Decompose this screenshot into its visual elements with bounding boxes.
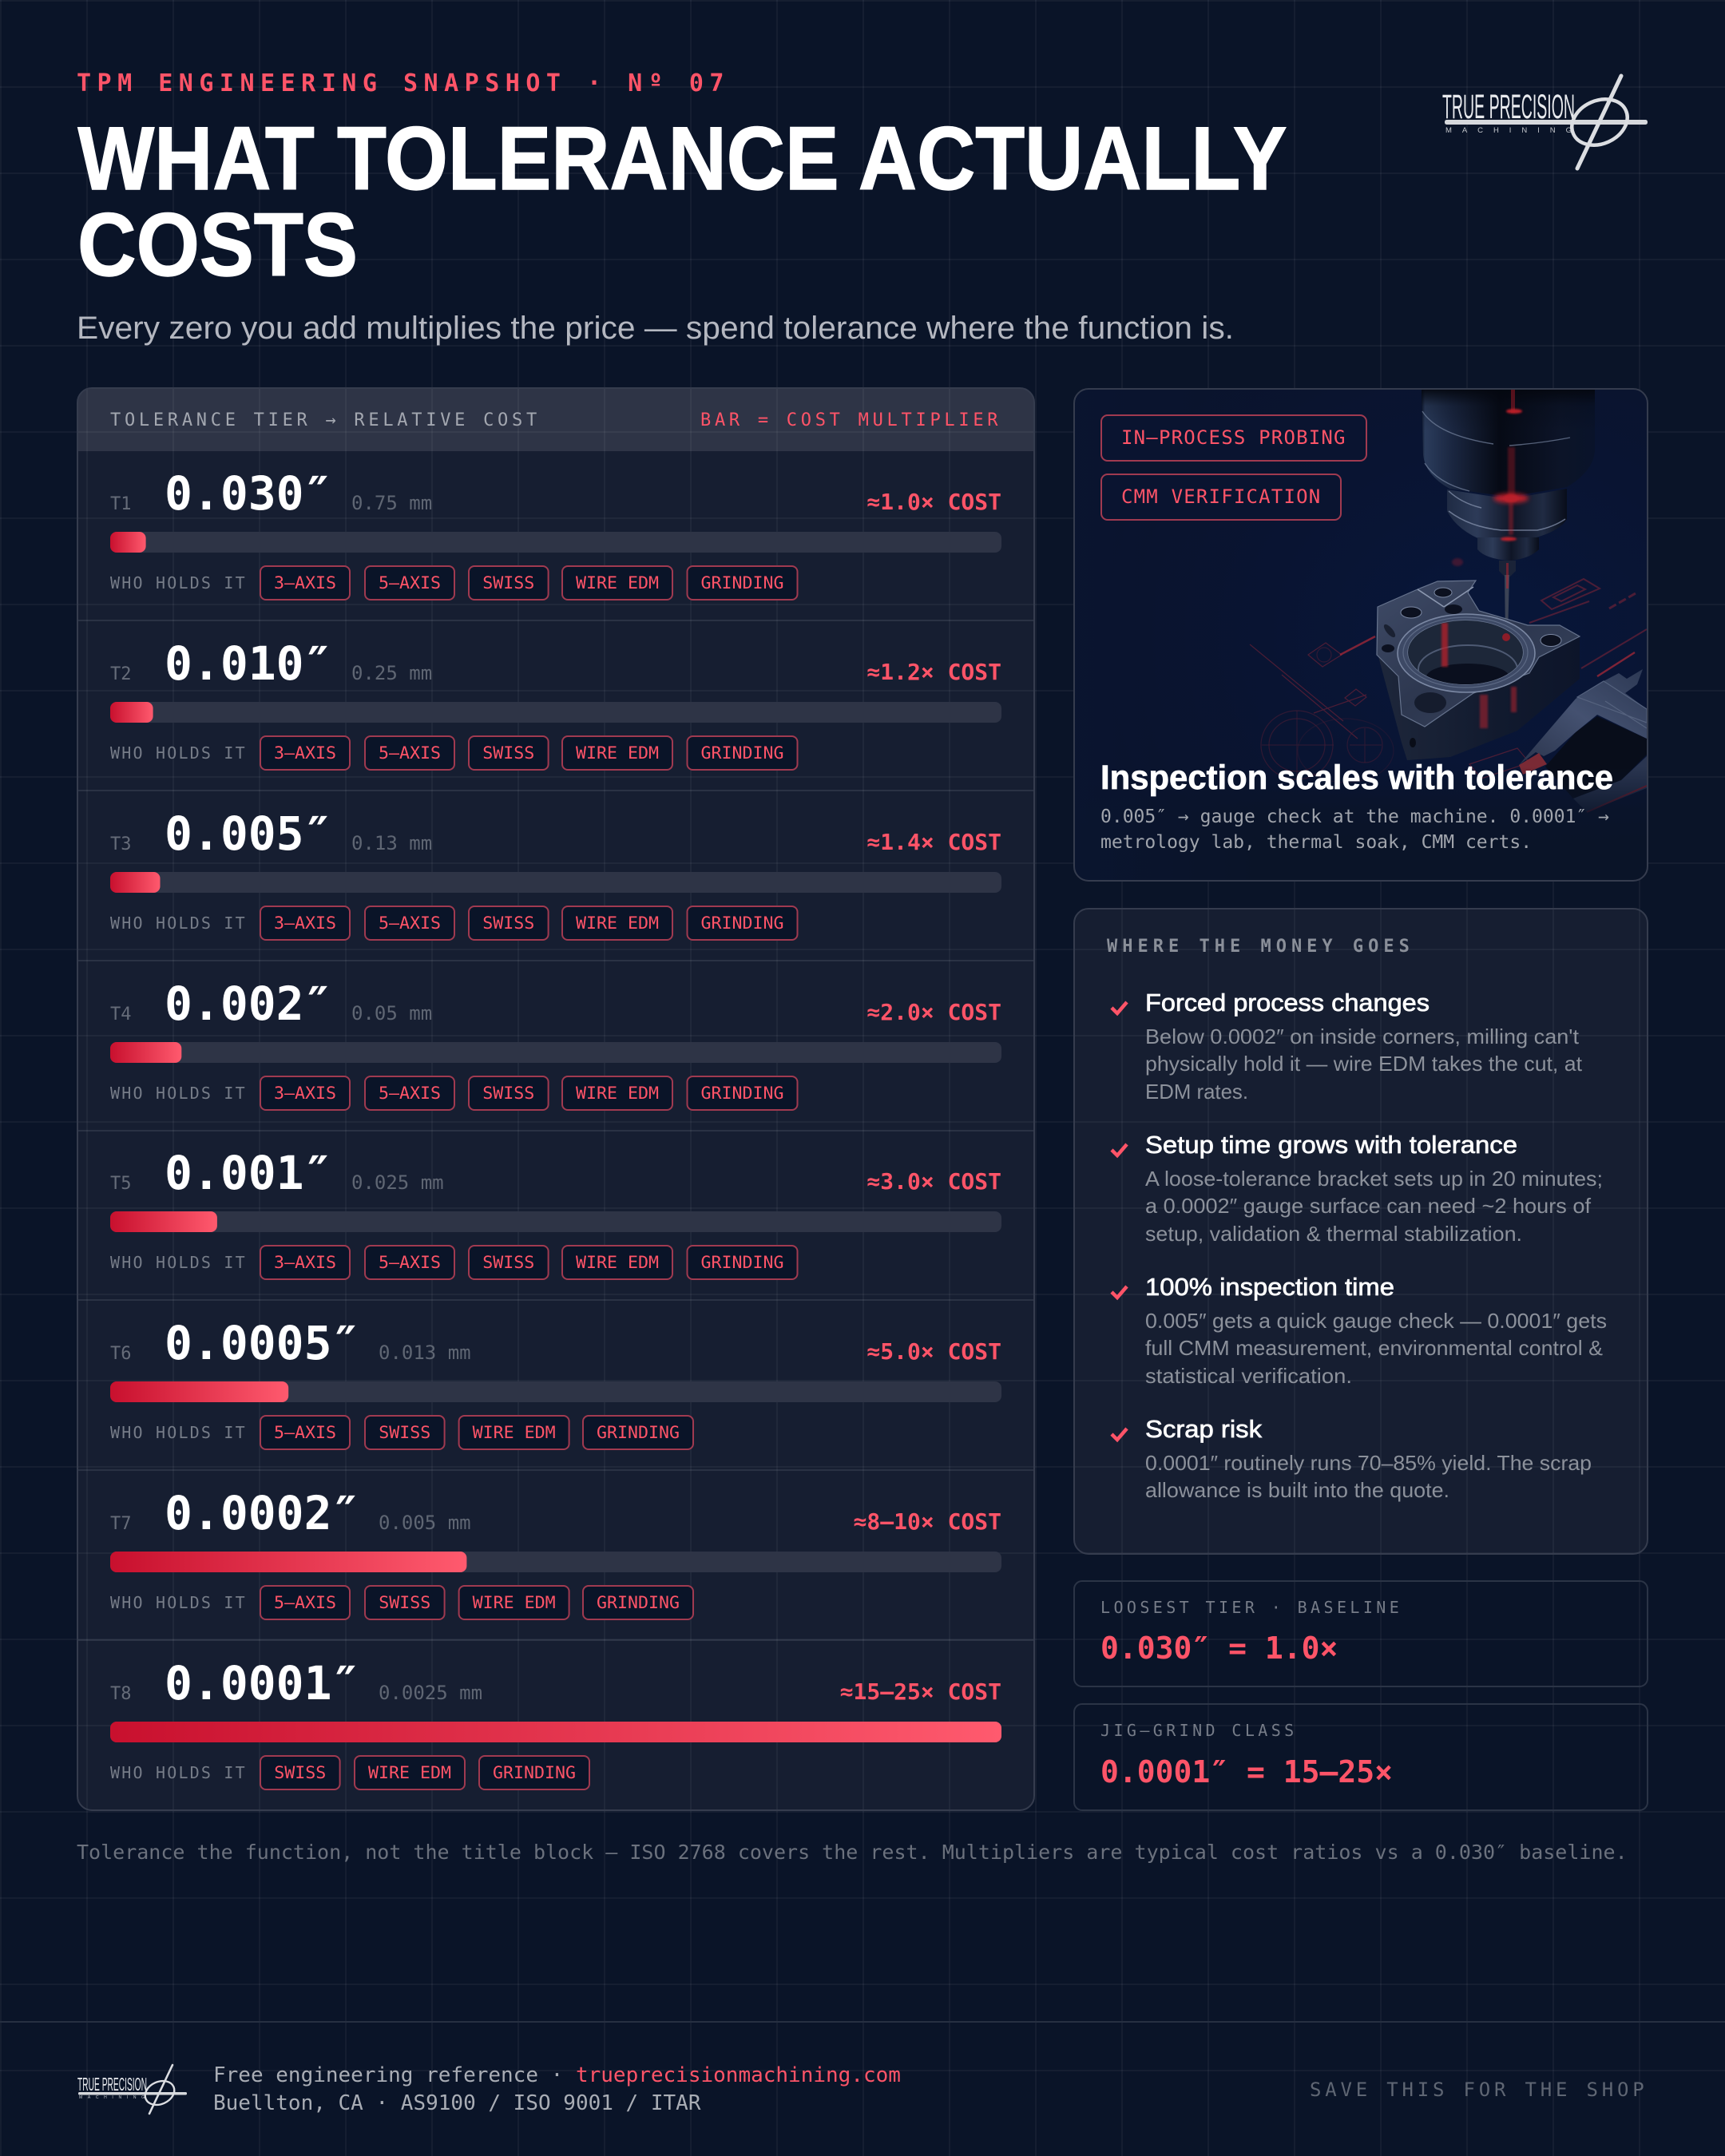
footnote: Tolerance the function, not the title block — ISO 2768 covers the rest. Multipliers are typical cost ratios vs a 0.030″ baseline.	[77, 1841, 1628, 1864]
tier row T4	[110, 977, 1001, 1110]
card description	[1100, 807, 1609, 853]
illustration: CMM probe, bracket and caliper	[1074, 389, 1648, 884]
tier row T7: 0.0002″	[165, 1486, 359, 1540]
card description: metrology lab, thermal soak, CMM certs.	[1100, 832, 1532, 853]
tier row T5: ≈3.0× COST	[866, 1168, 1001, 1195]
bar T2	[110, 702, 1001, 723]
panel border: where the money goes	[1074, 909, 1648, 1554]
chips T2	[260, 736, 797, 770]
card description: 0.005″ → gauge check at the machine. 0.0001″ →	[1100, 807, 1609, 827]
chips T4: 3–AXIS	[274, 1084, 336, 1104]
tier row T6: 0.013 mm	[379, 1342, 471, 1364]
chips T1: GRINDING	[700, 573, 784, 593]
stat card: jig-grind class	[1074, 1704, 1648, 1810]
tier row T5: WHO HOLDS IT	[110, 1253, 247, 1272]
title	[77, 109, 1287, 295]
chips T6: SWISS	[379, 1423, 430, 1443]
chips T4	[260, 1076, 797, 1110]
chips T3: SWISS	[482, 914, 534, 933]
chips T7: WIRE EDM	[473, 1593, 556, 1613]
panel: where the money goes background	[1074, 909, 1648, 1554]
tier row T2: 0.25 mm	[351, 662, 432, 684]
item: forced process changes: Below 0.0002″ on inside corners, milling can't	[1145, 1024, 1580, 1048]
stat card: loosest tier baseline	[1074, 1581, 1648, 1686]
tier row T6: ≈5.0× COST	[866, 1338, 1001, 1365]
item: forced process changes: Forced process changes	[1145, 989, 1430, 1017]
tier row T7: 0.005 mm	[379, 1512, 471, 1534]
panel border: tolerance table	[77, 388, 1034, 1810]
spindle lower section	[1447, 489, 1567, 541]
card heading: Inspection scales with tolerance	[1100, 759, 1613, 797]
item: setup time grows with tolerance	[1112, 1131, 1603, 1246]
chips T3: WIRE EDM	[576, 914, 659, 933]
item: setup time grows with tolerance: setup, validation & thermal stabilization.	[1145, 1222, 1522, 1246]
bar T6	[110, 1381, 1001, 1402]
chips T1: 3–AXIS	[274, 573, 336, 593]
tier row T8: WHO HOLDS IT	[110, 1763, 247, 1782]
tier row T3: 0.13 mm	[351, 832, 432, 854]
panel: inspection image card	[1074, 389, 1648, 884]
footer logo	[77, 2065, 187, 2114]
tier row T3: 0.005″	[165, 807, 332, 861]
tier row T7: T7	[110, 1514, 131, 1534]
footer text: Buellton, CA · AS9100 / ISO 9001 / ITAR	[213, 2091, 701, 2115]
chips T4: 5–AXIS	[379, 1084, 441, 1104]
panel: tolerance tier table background	[77, 388, 1034, 1810]
chips T5: WIRE EDM	[576, 1253, 659, 1273]
tag: in-process probing: IN–PROCESS PROBING	[1121, 426, 1346, 449]
tier row T1: T1	[110, 494, 131, 514]
caliper	[1545, 716, 1647, 799]
icon: check	[1112, 1429, 1127, 1440]
chips T3	[260, 906, 797, 940]
tier row T1: 0.75 mm	[351, 492, 432, 514]
bar T8	[110, 1722, 1001, 1742]
footer divider	[0, 2021, 1725, 2023]
item: forced process changes: physically hold it — wire EDM takes the cut, at	[1145, 1052, 1583, 1076]
tag: CMM verification: CMM VERIFICATION	[1121, 485, 1321, 508]
chips T4: GRINDING	[700, 1084, 784, 1104]
panel heading: where the money goes: WHERE THE MONEY GOES	[1107, 937, 1414, 957]
item: scrap risk: Scrap risk	[1145, 1415, 1263, 1443]
chips T5: SWISS	[482, 1253, 534, 1273]
bar T7	[110, 1552, 1001, 1572]
footer logo: TRUE PRECISION	[77, 2074, 147, 2095]
item: 100% inspection time: statistical verification.	[1145, 1364, 1352, 1388]
chips T6	[260, 1416, 693, 1449]
icon: check	[1112, 1286, 1127, 1298]
tier row T1: ≈1.0× COST	[866, 489, 1001, 515]
chips T8: SWISS	[274, 1763, 326, 1783]
item: forced process changes	[1112, 989, 1583, 1104]
title: WHAT TOLERANCE ACTUALLY	[78, 109, 1287, 208]
chips T4: WIRE EDM	[576, 1084, 659, 1104]
chips T3: GRINDING	[700, 914, 784, 933]
chips T1: 5–AXIS	[379, 573, 441, 593]
tier row T8: T8	[110, 1684, 131, 1704]
icon: check	[1112, 1002, 1127, 1013]
chips T7: SWISS	[379, 1593, 430, 1613]
chips T5: 3–AXIS	[274, 1253, 336, 1273]
item: 100% inspection time: 0.005″ gets a quick gauge check — 0.0001″ gets	[1145, 1309, 1607, 1333]
tier row T2: ≈1.2× COST	[866, 659, 1001, 685]
bracket lower body	[1377, 635, 1580, 760]
tier row T7: WHO HOLDS IT	[110, 1593, 247, 1612]
chips T2: 3–AXIS	[274, 743, 336, 763]
tier row T8	[110, 1656, 1001, 1789]
item: scrap risk: allowance is built into the quote.	[1145, 1478, 1449, 1502]
tag: in-process probing	[1101, 415, 1366, 461]
item: scrap risk	[1112, 1415, 1592, 1502]
tier row T6	[110, 1316, 1001, 1449]
tier row T1: WHO HOLDS IT	[110, 573, 247, 593]
chips T2: SWISS	[482, 743, 534, 763]
chips T2: 5–AXIS	[379, 743, 441, 763]
tier row T2: 0.010″	[165, 636, 332, 691]
tier row T8: 0.0025 mm	[379, 1682, 482, 1704]
item: 100% inspection time: 100% inspection time	[1145, 1273, 1394, 1301]
tier row T3: WHO HOLDS IT	[110, 914, 247, 933]
icon: check	[1112, 1144, 1127, 1155]
logo: True Precision Machining: MACHINING	[1445, 126, 1572, 135]
tier row T5	[110, 1146, 1001, 1279]
tier row T3: ≈1.4× COST	[866, 829, 1001, 855]
item: setup time grows with tolerance: A loose-tolerance bracket sets up in 20 minutes;	[1145, 1167, 1603, 1191]
item: 100% inspection time	[1112, 1273, 1607, 1388]
tier row T2: T2	[110, 664, 131, 684]
item: forced process changes: EDM rates.	[1145, 1080, 1248, 1104]
tier row T1	[110, 466, 1001, 600]
chips T8: GRINDING	[493, 1763, 576, 1783]
logo: True Precision Machining	[1442, 76, 1648, 168]
item: setup time grows with tolerance: a 0.0002″ gauge surface can need ~2 hours of	[1145, 1194, 1592, 1218]
footer text: Free engineering reference · trueprecisionmachining.com	[213, 2063, 901, 2087]
chips T7	[260, 1586, 693, 1619]
item: scrap risk: 0.0001″ routinely runs 70–85% yield. The scrap	[1145, 1451, 1592, 1475]
bracket top face	[1377, 581, 1580, 727]
item: setup time grows with tolerance: Setup time grows with tolerance	[1145, 1131, 1517, 1159]
chips T6: WIRE EDM	[473, 1423, 556, 1443]
red reflections on spindle	[1452, 389, 1529, 589]
stat card: loosest tier baseline: LOOSEST TIER · BASELINE	[1100, 1598, 1402, 1617]
tier row T4: WHO HOLDS IT	[110, 1084, 247, 1103]
table header	[110, 410, 1001, 430]
item: 100% inspection time: full CMM measurement, environmental control &	[1145, 1336, 1603, 1360]
footer logo: MACHINING	[79, 2095, 145, 2100]
tier row T6: WHO HOLDS IT	[110, 1423, 247, 1442]
bar T4	[110, 1042, 1001, 1063]
tier row T7: ≈8–10× COST	[854, 1508, 1001, 1535]
chips T2: WIRE EDM	[576, 743, 659, 763]
title: COSTS	[77, 195, 358, 295]
table header: TOLERANCE TIER → RELATIVE COST	[110, 410, 541, 430]
dark scrim over lower card	[1291, 771, 1647, 850]
tier row T1: 0.030″	[165, 466, 332, 521]
chips T3: 5–AXIS	[379, 914, 441, 933]
bar T3	[110, 872, 1001, 893]
chips T2: GRINDING	[700, 743, 784, 763]
tier row T6: T6	[110, 1344, 131, 1364]
chips T5: GRINDING	[700, 1253, 784, 1273]
tier row T4: ≈2.0× COST	[866, 999, 1001, 1025]
chips T5	[260, 1246, 797, 1279]
bar T5	[110, 1211, 1001, 1232]
tier row T5: 0.001″	[165, 1146, 332, 1200]
table header: BAR = COST MULTIPLIER	[700, 410, 1001, 430]
tier row T2: WHO HOLDS IT	[110, 743, 247, 763]
chips T8	[260, 1756, 589, 1789]
tier row T8: 0.0001″	[165, 1656, 359, 1710]
tag: CMM verification	[1101, 474, 1341, 520]
tier row T6: 0.0005″	[165, 1316, 359, 1370]
chips T5: 5–AXIS	[379, 1253, 441, 1273]
stat card: jig-grind class: 0.0001″ = 15–25×	[1100, 1754, 1393, 1789]
tier row T5: T5	[110, 1174, 131, 1194]
stat card: loosest tier baseline: 0.030″ = 1.0×	[1100, 1631, 1338, 1666]
tier row T4: T4	[110, 1005, 131, 1024]
footer call to action: SAVE THIS FOR THE SHOP	[1310, 2079, 1648, 2101]
chips T1: WIRE EDM	[576, 573, 659, 593]
chips T7: GRINDING	[597, 1593, 680, 1613]
chips T4: SWISS	[482, 1084, 534, 1104]
tier row T3: T3	[110, 834, 131, 854]
spindle upper body	[1422, 389, 1595, 497]
tier row T2	[110, 636, 1001, 770]
chips T1	[260, 566, 797, 600]
tier row T5: 0.025 mm	[351, 1171, 444, 1194]
chips T3: 3–AXIS	[274, 914, 336, 933]
tier row T4: 0.002″	[165, 977, 332, 1031]
chips T8: WIRE EDM	[368, 1763, 451, 1783]
chips T6: 5–AXIS	[274, 1423, 336, 1443]
eyebrow: TPM ENGINEERING SNAPSHOT · Nº 07	[77, 69, 730, 97]
chips T6: GRINDING	[597, 1423, 680, 1443]
tier row T3	[110, 807, 1001, 940]
tier row T7	[110, 1486, 1001, 1619]
bar T1	[110, 532, 1001, 553]
footer text	[213, 2063, 901, 2115]
stat card: jig-grind class: JIG–GRIND CLASS	[1100, 1721, 1298, 1740]
chips T7: 5–AXIS	[274, 1593, 336, 1613]
tier row T4: 0.05 mm	[351, 1002, 432, 1024]
subtitle: Every zero you add multiplies the price — spend tolerance where the function is.	[77, 311, 1234, 346]
chips T1: SWISS	[482, 573, 534, 593]
tier row T8: ≈15–25× COST	[840, 1678, 1001, 1705]
